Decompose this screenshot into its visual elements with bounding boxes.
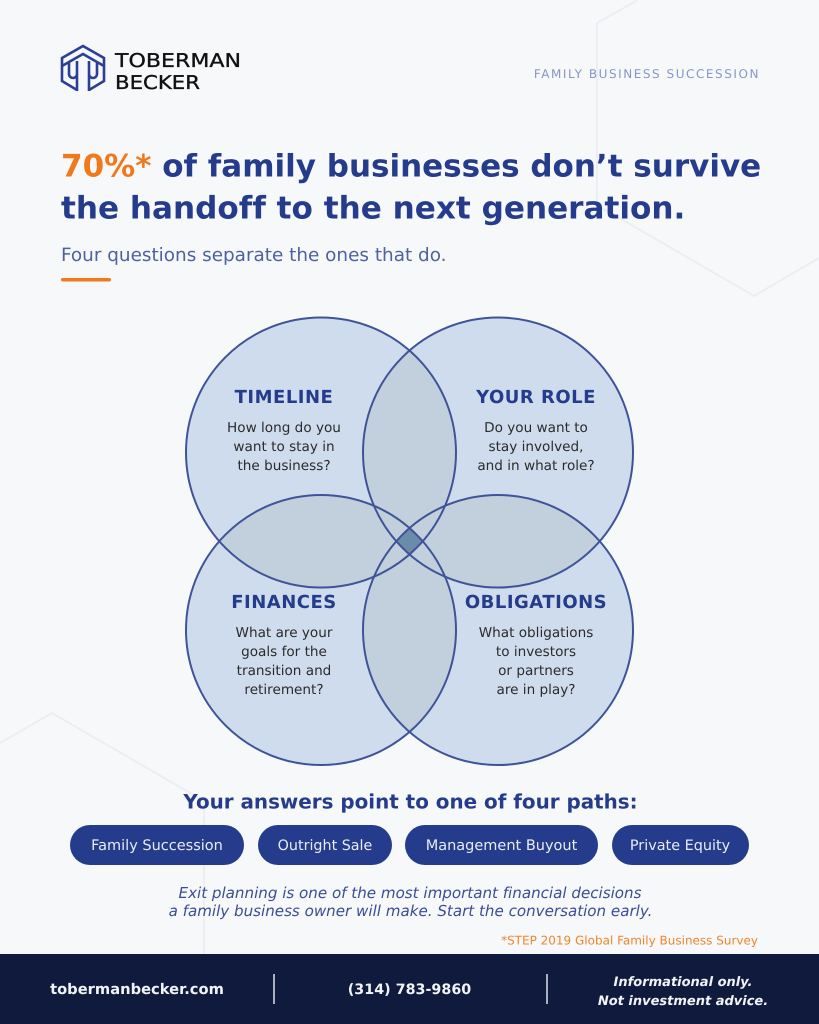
venn: timeline: the business? <box>237 458 331 474</box>
venn diagram <box>186 318 633 765</box>
venn: obligations: What obligations <box>479 625 593 641</box>
pill: private equity <box>612 825 749 865</box>
pill: management buyout <box>405 825 598 865</box>
title: the handoff to the next generation. <box>61 190 685 226</box>
venn: your role: stay involved, <box>488 439 584 455</box>
venn: obligations: are in play? <box>496 682 576 698</box>
pill: family succession <box>70 825 244 865</box>
venn: timeline: want to stay in <box>233 439 335 455</box>
venn: finances: retirement? <box>244 682 324 698</box>
venn: timeline <box>227 387 341 474</box>
circle outlines <box>186 318 633 765</box>
circle fills <box>186 318 633 765</box>
footer: disclaimer: Not investment advice. <box>598 994 768 1009</box>
subtitle: Four questions separate the ones that do. <box>61 245 446 266</box>
logo wordmark: BECKER <box>115 72 200 94</box>
venn: timeline: TIMELINE <box>235 387 333 408</box>
path pills <box>70 825 749 865</box>
footer band <box>0 954 819 1024</box>
venn: finances: FINANCES <box>231 592 337 613</box>
pill: management buyout: Management Buyout <box>426 838 578 854</box>
logo wordmark: TOBERMAN <box>114 50 241 72</box>
venn: obligations <box>465 592 607 698</box>
venn: your role: YOUR ROLE <box>475 387 596 408</box>
venn: timeline: How long do you <box>227 420 341 436</box>
title <box>61 148 761 226</box>
accent rule <box>61 278 111 282</box>
pill: outright sale <box>258 825 392 865</box>
overlap regions <box>186 318 633 765</box>
pill: private equity: Private Equity <box>630 838 731 854</box>
source footnote: *STEP 2019 Global Family Business Survey <box>501 934 758 948</box>
center overlap <box>398 530 422 553</box>
venn: obligations: OBLIGATIONS <box>465 592 607 613</box>
venn: finances: What are your <box>236 625 333 641</box>
title: 70%* of family businesses don’t survive <box>61 148 761 184</box>
logo wordmark <box>114 50 241 94</box>
venn: finances: goals for the <box>241 644 327 660</box>
paths heading: Your answers point to one of four paths: <box>182 790 638 814</box>
closing note: a family business owner will make. Start the conversation early. <box>169 902 652 920</box>
closing note <box>169 884 652 920</box>
footer: phone: (314) 783-9860 <box>348 982 471 998</box>
venn: obligations: to investors <box>496 644 576 660</box>
footer: disclaimer: Informational only. <box>614 975 752 990</box>
venn: your role <box>475 387 596 474</box>
footer: disclaimer <box>598 975 768 1009</box>
venn: finances: transition and <box>237 663 331 679</box>
closing note: Exit planning is one of the most important financial decisions <box>179 884 642 902</box>
pill: outright sale: Outright Sale <box>278 838 373 854</box>
venn: your role: Do you want to <box>484 420 588 436</box>
venn: obligations: or partners <box>498 663 574 679</box>
pill: family succession: Family Succession <box>91 838 223 854</box>
venn: your role: and in what role? <box>477 458 595 474</box>
icon: hexagon logo mark <box>62 46 104 91</box>
logo <box>62 46 241 94</box>
venn: finances <box>231 592 337 698</box>
footer: website: tobermanbecker.com <box>50 981 224 998</box>
header label: FAMILY BUSINESS SUCCESSION <box>534 67 760 81</box>
